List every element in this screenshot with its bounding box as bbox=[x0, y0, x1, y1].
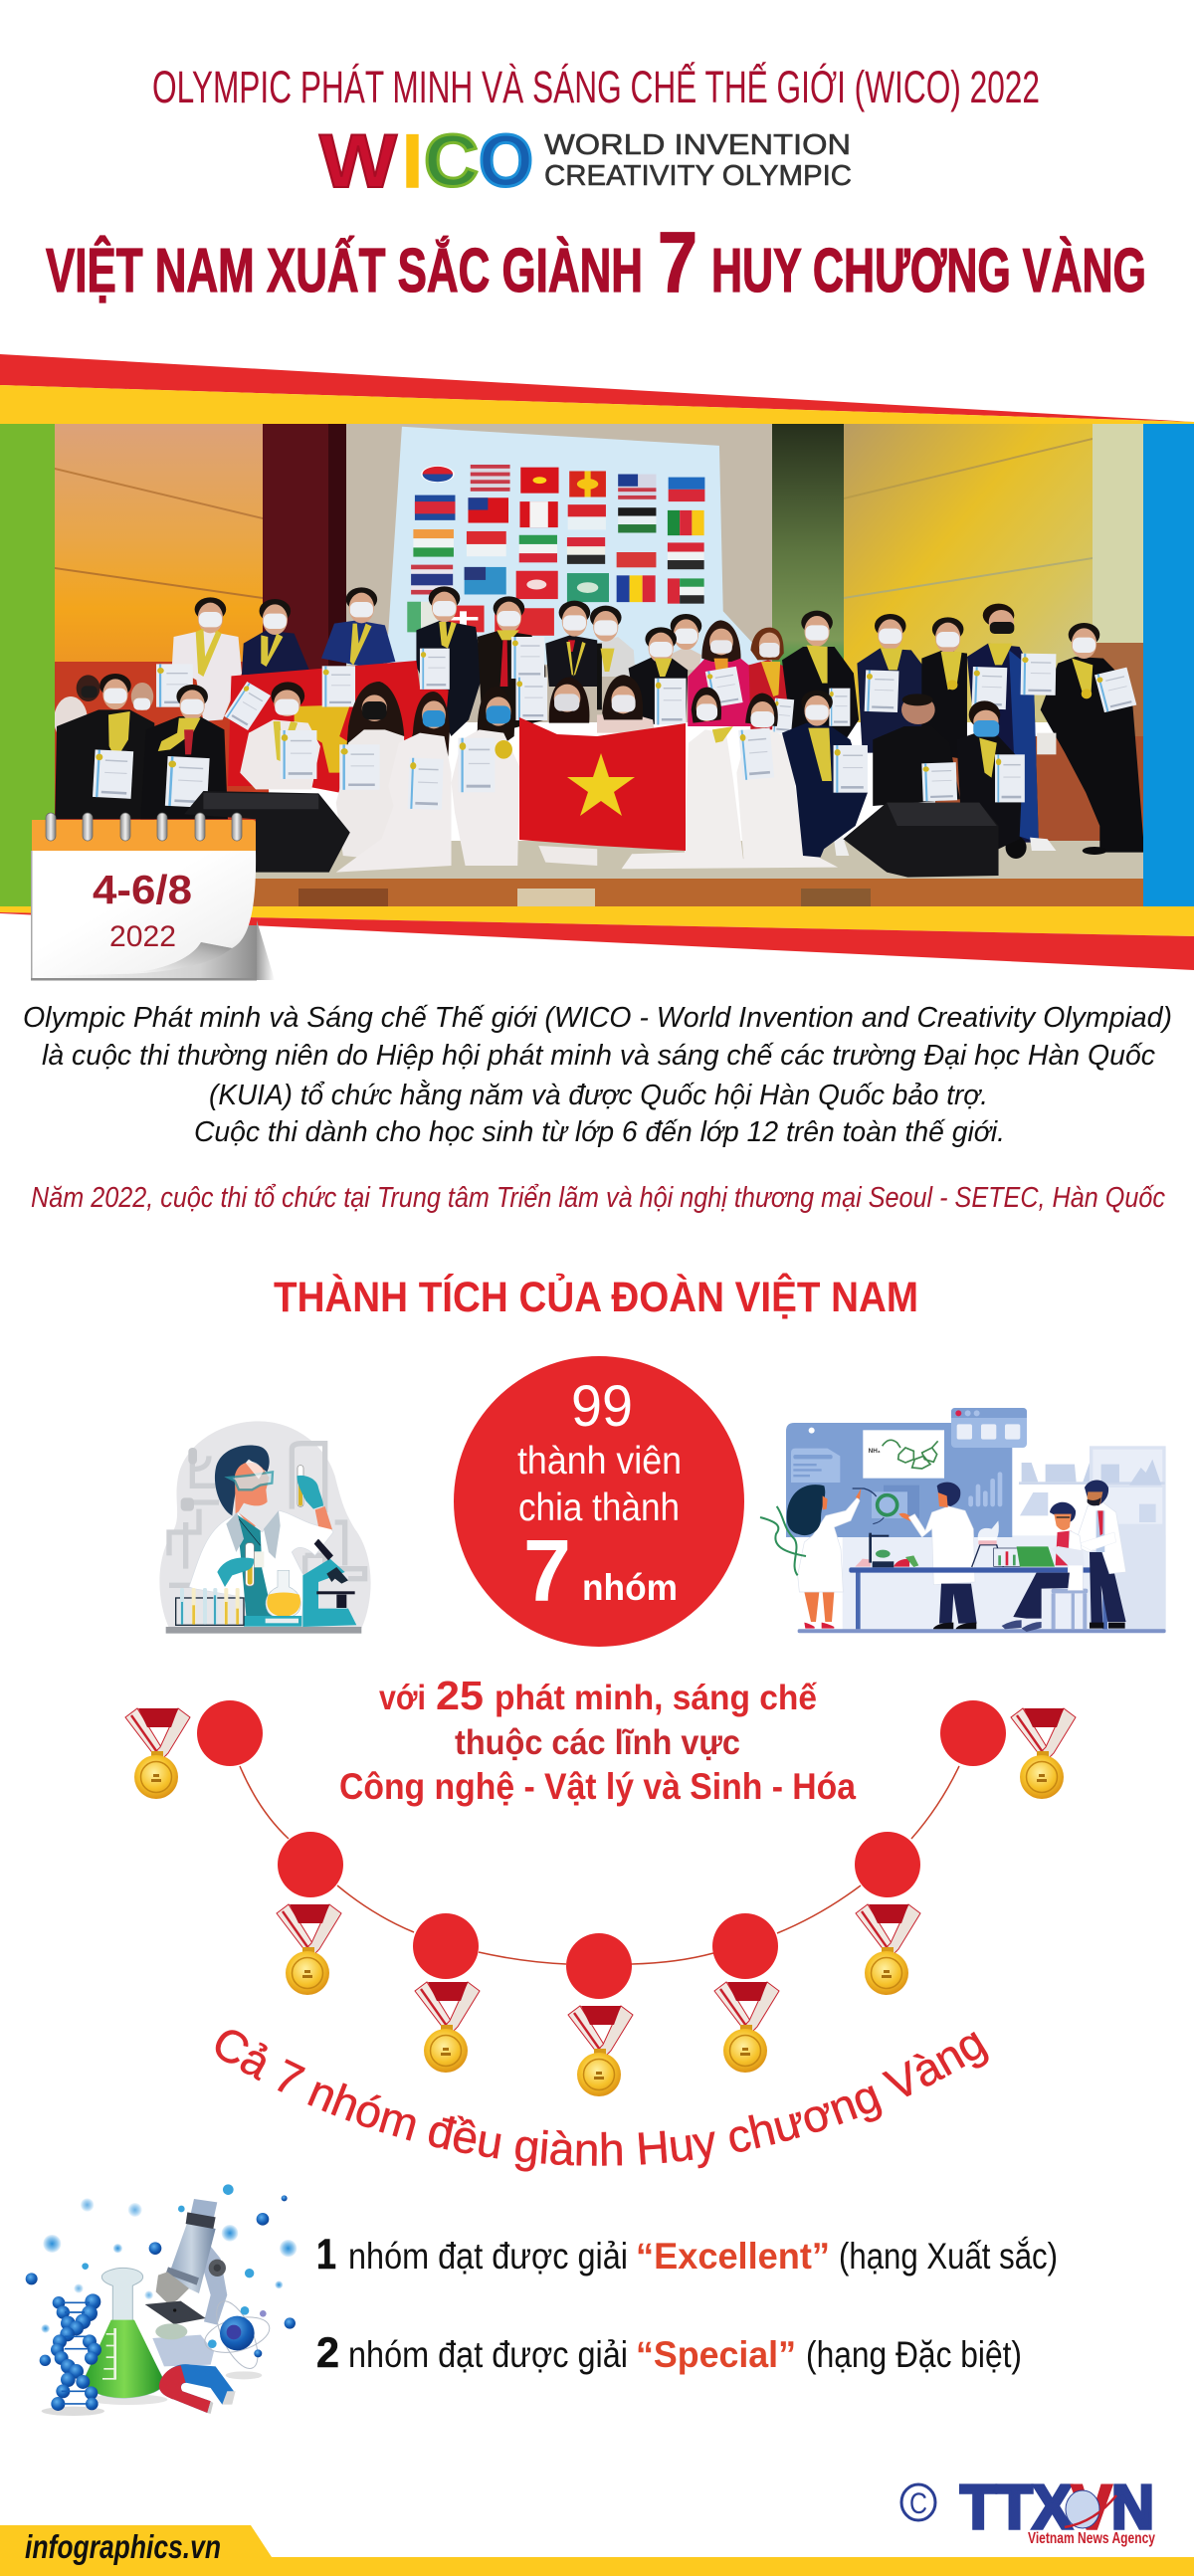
text: 25 inventions and fields: thuộc các lĩnh vực bbox=[455, 1723, 740, 1762]
calendar: 4-6/8 2022: 2022 bbox=[109, 920, 176, 953]
ribbon: bottom yellow and red bbox=[0, 906, 1194, 970]
circle: 99 members, 7 groups bbox=[454, 1356, 744, 1647]
text: 25 inventions and fields: 25 bbox=[436, 1673, 484, 1718]
headline: Việt Nam xuất sắc giành 7 Huy chương Vàng: VIỆT NAM XUẤT SẮC GIÀNH bbox=[46, 237, 643, 305]
award line 2: Special: “Special” bbox=[636, 2334, 796, 2375]
text: 25 inventions and fields: với bbox=[379, 1679, 426, 1717]
award line 1: Excellent: (hạng Xuất sắc) bbox=[839, 2236, 1058, 2277]
award line 2: Special: 2 bbox=[316, 2329, 339, 2377]
intro paragraph: Olympic Phát minh và Sáng chế Thế giới (WICO - World Invention and Creativity Olympiad) bbox=[23, 1002, 1172, 1034]
side bars: green and blue bbox=[0, 424, 1194, 906]
logo: WICO: O bbox=[479, 119, 533, 202]
big Vietnam flag with gold star bbox=[519, 717, 686, 851]
footer bar with infographics.vn tab bbox=[0, 2525, 1194, 2576]
ribbon: top red and yellow bbox=[0, 354, 1194, 425]
curved text: all seven groups won gold: Cả 7 nhóm đều giành Huy chương Vàng bbox=[215, 2030, 989, 2171]
TTXVN logo: Vietnam News Agency bbox=[1028, 2530, 1155, 2547]
logo: WICO: W bbox=[319, 119, 397, 204]
headline: Việt Nam xuất sắc giành 7 Huy chương Vàng bbox=[46, 215, 1146, 310]
award line 1: Excellent: 1 bbox=[316, 2231, 336, 2279]
screen with country flags bbox=[346, 427, 772, 665]
text: 25 inventions and fields bbox=[339, 1673, 856, 1807]
medals: seven gold medals bbox=[125, 1708, 1076, 2096]
award line 2: Special: (hạng Đặc biệt) bbox=[806, 2334, 1022, 2375]
intro paragraph bbox=[23, 1002, 1172, 1148]
intro paragraph: (KUIA) tổ chức hằng năm và được Quốc hội Hàn Quốc bảo trợ. bbox=[209, 1079, 988, 1111]
people left half bbox=[54, 586, 597, 873]
illustration: laboratory team: NH₃ bbox=[869, 1448, 881, 1455]
stage floor and front bbox=[253, 841, 1143, 906]
intro paragraph: là cuộc thi thường niên do Hiệp hội phát minh và sáng chế các trường Đại học Hàn Quốc bbox=[42, 1040, 1155, 1072]
circle: 99 members, 7 groups: chia thành bbox=[518, 1486, 680, 1529]
intro paragraph: Cuộc thi dành cho học sinh từ lớp 6 đến lớp 12 trên toàn thế giới. bbox=[194, 1116, 1005, 1148]
people right half bbox=[590, 604, 1144, 878]
TTXVN logo: TTXVN bbox=[960, 2474, 1154, 2542]
headline: Việt Nam xuất sắc giành 7 Huy chương Vàng: 7 bbox=[658, 215, 697, 310]
award line 1: Excellent bbox=[316, 2231, 1058, 2279]
photo: Vietnamese delegation on stage bbox=[54, 424, 1144, 906]
section heading: Thành tích của đoàn Việt Nam: THÀNH TÍCH CỦA ĐOÀN VIỆT NAM bbox=[274, 1273, 918, 1321]
illustration: scientist with microscope bbox=[159, 1421, 371, 1634]
logo: WICO: C bbox=[424, 119, 479, 202]
award line 1: Excellent: “Excellent” bbox=[636, 2236, 830, 2277]
logo: WICO: I bbox=[402, 119, 423, 204]
award line 2: Special bbox=[316, 2329, 1022, 2377]
footer bar with infographics.vn tab: infographics.vn bbox=[25, 2528, 221, 2565]
circle: 99 members, 7 groups: 99 bbox=[571, 1374, 633, 1439]
illustration: laboratory team bbox=[760, 1408, 1166, 1633]
circle: 99 members, 7 groups: thành viên bbox=[517, 1440, 682, 1483]
circle: 99 members, 7 groups: nhóm bbox=[582, 1567, 678, 1608]
logo: WICO: WORLD INVENTION bbox=[544, 129, 851, 161]
circle: 99 members, 7 groups: 7 bbox=[523, 1521, 571, 1620]
logo: WICO: CREATIVITY OLYMPIC bbox=[544, 160, 852, 192]
award line 1: Excellent: nhóm đạt được giải bbox=[348, 2236, 628, 2277]
text: 25 inventions and fields: phát minh, sáng chế bbox=[495, 1679, 818, 1717]
illustration: science objects bbox=[26, 2184, 297, 2416]
award line 2: Special: nhóm đạt được giải bbox=[348, 2334, 628, 2375]
TTXVN logo: C bbox=[909, 2487, 927, 2520]
garland curve with seven red dots bbox=[197, 1700, 1006, 1999]
calendar: 4-6/8 2022 bbox=[31, 813, 275, 981]
text: 25 inventions and fields: Công nghệ - Vật lý và Sinh - Hóa bbox=[339, 1766, 856, 1807]
logo: WICO bbox=[319, 119, 852, 204]
calendar: 4-6/8 2022: 4-6/8 bbox=[93, 867, 192, 912]
photo background: hall walls and curtains bbox=[55, 424, 1143, 866]
